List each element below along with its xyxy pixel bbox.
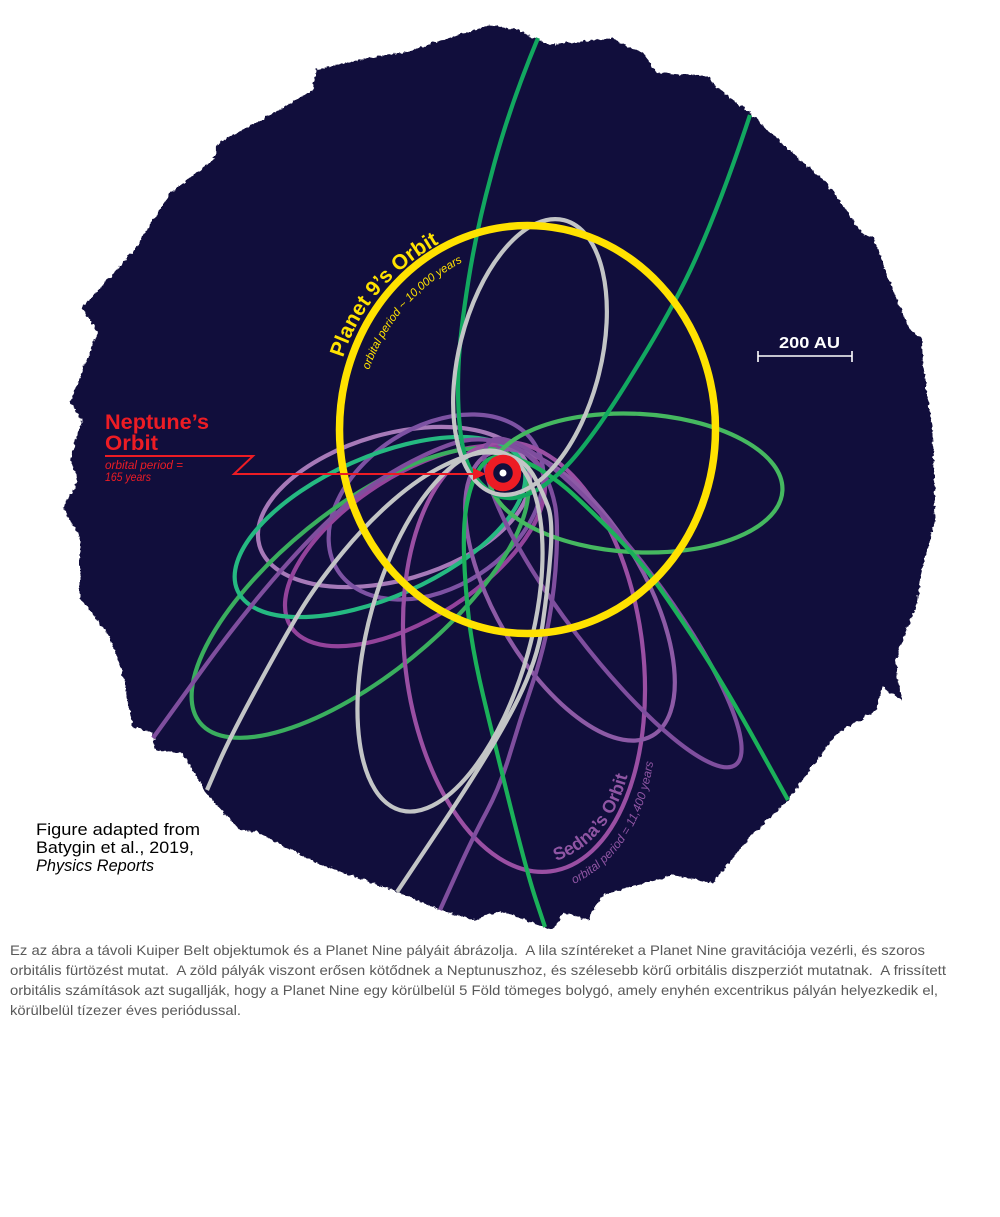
scale bar: 200 AU: 200 AU [779,335,840,352]
orbit: open green trajectory from bottom to lower right [464,456,788,927]
label: Planet 9 orbital period: orbital period ~ 10,000 years [364,257,462,369]
orbit: open green trajectory from top to upper right [458,38,750,498]
label: Neptune orbital period: orbital period = [105,460,183,472]
orbit: open violet trajectory [153,439,557,910]
credit: figure source: Physics Reports [36,856,154,875]
label: Neptune's Orbit: Neptune’s [105,411,209,434]
orbit: light purple ellipse [239,398,549,616]
caption text block: orbitális fürtözést mutat. A zöld pályák viszont erősen kötődnek a Neptunuszhoz, és szélesebb körű orbitális diszperziót mutatnak. A frissített [10,962,946,978]
orbit: right light purple ellipse [423,416,717,774]
label: Neptune's Orbit: Orbit [105,432,158,455]
orbit: large green ellipse [148,399,572,787]
panel: dark space background blob [63,25,935,930]
orbit: magenta ellipse [252,406,578,686]
label: Sedna orbital period: orbital period = 11,400 years [572,761,653,884]
label: Sedna's Orbit: Sedna’s Orbit [554,773,628,860]
label: Planet 9's Orbit: Planet 9’s Orbit [330,232,439,356]
orbit: Planet 9 [340,226,716,634]
orbit: violet ellipse [294,376,578,638]
orbit: open gray trajectory [207,452,551,892]
credit: figure source: Figure adapted from [36,820,200,839]
arrow: Neptune leader line [105,456,486,480]
orbit: lower gray ellipse [322,430,578,832]
orbit: right green ellipse [486,406,786,560]
chart: orbit diagram [148,38,788,927]
orbit: Sedna [380,428,668,886]
label: Neptune orbital period: 165 years [105,472,151,484]
scale bar: 200 AU [758,335,852,362]
orbit: upper gray ellipse [427,203,633,511]
orbit: teal ellipse [209,400,551,654]
orbit: long violet ellipse [452,412,774,794]
caption text block: Ez az ábra a távoli Kuiper Belt objektumok és a Planet Nine pályáit ábrázolja. A lila színtéreket a Planet Nine gravitációja vezérli, és szoros [10,942,925,958]
credit: figure source: Batygin et al., 2019, [36,838,194,857]
caption text block: orbitális számítások azt sugallják, hogy a Planet Nine egy körülbelül 5 Föld tömeges bolygó, amely enyhén excentrikus pályán helyezkedik el, [10,982,938,998]
icon: Neptune orbit and Sun [489,459,517,487]
caption text block: körülbelül tízezer éves periódussal. [10,1002,241,1018]
